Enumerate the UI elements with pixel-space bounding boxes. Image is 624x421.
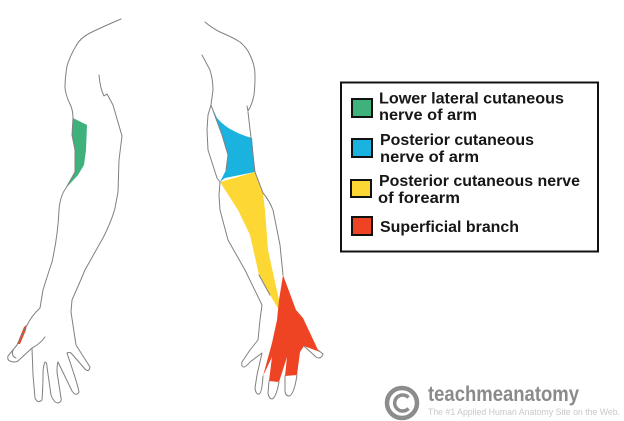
tagline: The #1 Applied Human Anatomy Site on the Web. [428, 407, 620, 417]
legend item: lower lateral cutaneous nerve of arm: Lower lateral cutaneous [379, 90, 564, 108]
legend item: posterior cutaneous nerve of forearm [351, 173, 580, 207]
left arm (anterior view) [8, 19, 122, 403]
legend item: superficial branch: Superficial branch [380, 219, 519, 236]
arm outline [202, 22, 323, 399]
region: superficial branch on thumb [17, 325, 26, 344]
legend [341, 82, 598, 252]
legend item: posterior cutaneous nerve of forearm: of forearm [378, 190, 460, 207]
region: lower lateral cutaneous nerve of arm [66, 118, 87, 188]
right arm (posterior view) [202, 22, 323, 399]
legend item: lower lateral cutaneous nerve of arm: nerve of arm [379, 107, 477, 124]
legend item: posterior cutaneous nerve of arm: nerve of arm [380, 149, 479, 166]
legend item: posterior cutaneous nerve of forearm: Posterior cutaneous nerve [379, 173, 580, 190]
region: posterior cutaneous nerve of forearm [220, 172, 279, 310]
legend item: lower lateral cutaneous nerve of arm [352, 90, 564, 124]
legend item: posterior cutaneous nerve of arm [352, 132, 534, 166]
logo: teachmeanatomy [387, 383, 620, 418]
legend box [341, 82, 598, 252]
thumb nail [12, 350, 16, 358]
region: posterior cutaneous nerve of arm [211, 105, 255, 182]
legend item: posterior cutaneous nerve of arm: Posterior cutaneous [380, 132, 534, 149]
arm outline [8, 19, 122, 403]
region: superficial branch on hand [263, 275, 320, 382]
brand name: teachmeanatomy [428, 383, 579, 406]
icon: copyright circle [387, 388, 417, 418]
